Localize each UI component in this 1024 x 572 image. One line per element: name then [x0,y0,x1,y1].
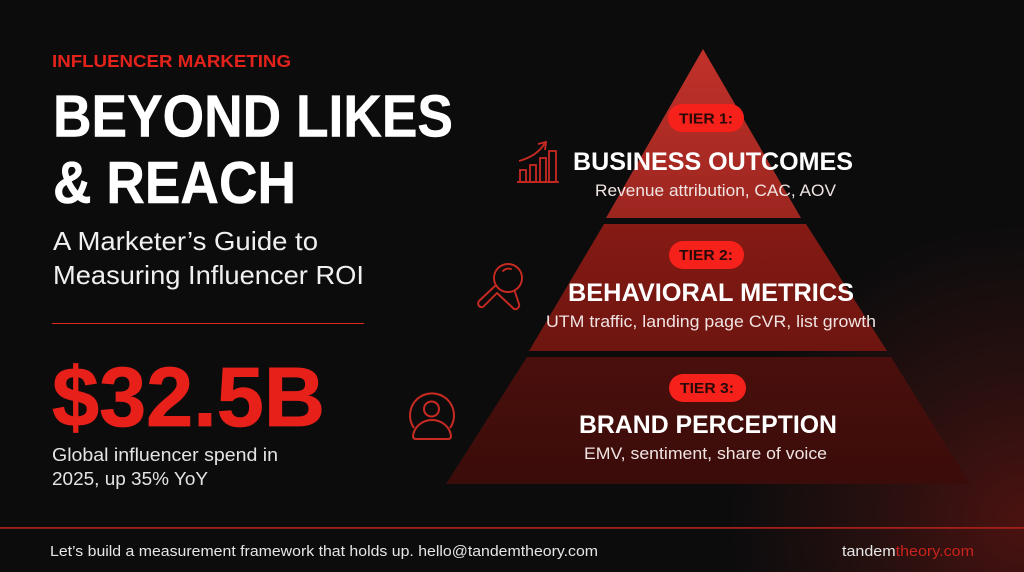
tier 3 metrics: EMV, sentiment, share of voice [584,445,827,463]
title: BEYOND LIKES [53,84,453,150]
tier 3 badge: TIER 3: [680,381,734,397]
footer message: Let’s build a measurement framework that holds up. hello@tandemtheory.com [50,543,598,560]
icon: growth bar chart [517,142,559,182]
tier 3 badge [669,374,746,402]
tier 2 metrics: UTM traffic, landing page CVR, list growth [546,313,876,331]
tier 1 panel [606,49,801,218]
eyebrow: influencer marketing: INFLUENCER MARKETING [52,51,291,71]
footer rule [0,527,1024,529]
icon: person in circle [410,393,454,439]
pyramid [446,49,970,484]
stat caption [52,445,278,489]
title: & REACH [53,150,296,216]
tier 1 badge: TIER 1: [679,112,733,128]
tier 3 panel [446,357,970,484]
stat caption: 2025, up 35% YoY [52,469,208,489]
tier 2 heading: BEHAVIORAL METRICS [568,279,854,307]
tier 3 heading: BRAND PERCEPTION [579,411,837,439]
tier 1 badge [668,104,744,132]
tier 2 panel [529,224,887,351]
icon: magnifying glass with hand [478,264,522,309]
tier 1 heading: BUSINESS OUTCOMES [573,148,853,176]
stat caption: Global influencer spend in [52,445,278,465]
tier 2 badge [669,241,744,269]
tier 2 badge: TIER 2: [679,248,733,264]
title [53,84,453,216]
big stat: $32.5B [52,350,325,444]
subtitle: Measuring Influencer ROI [53,260,364,290]
footer brand: tandemtheory.com [842,543,974,560]
subtitle [53,226,364,290]
subtitle: A Marketer’s Guide to [53,226,318,256]
tier 1 metrics: Revenue attribution, CAC, AOV [595,182,836,200]
